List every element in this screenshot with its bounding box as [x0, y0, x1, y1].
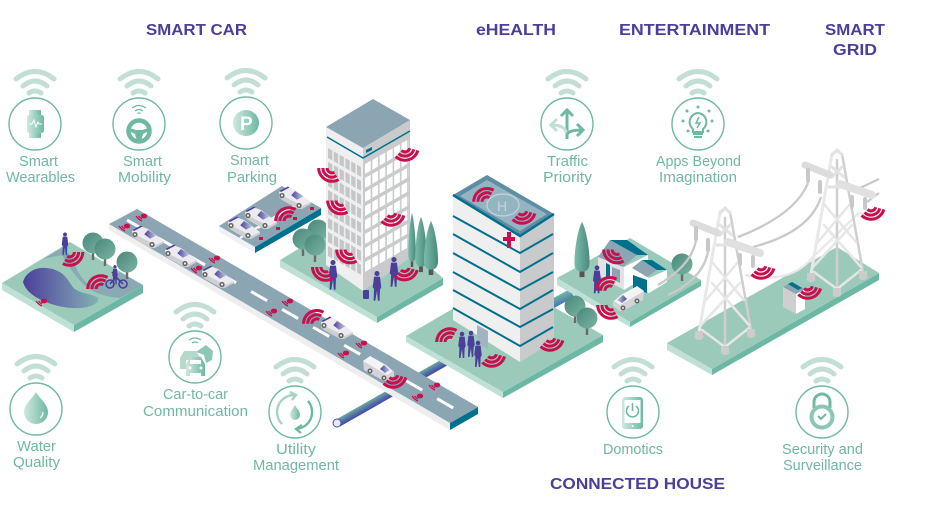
label: Smart Mobility [118, 154, 172, 186]
label: Water Quality: Quality [13, 455, 61, 471]
label: Utility Management [253, 442, 339, 474]
path [43, 248, 143, 298]
road cars [132, 226, 394, 381]
road [109, 209, 478, 430]
helipad roof [453, 175, 554, 236]
icon: Car-to-car Communication [169, 304, 221, 383]
title: CONNECTED HOUSE: CONNECTED HOUSE [550, 476, 725, 493]
label: Apps Beyond Imagination: Imagination [659, 170, 737, 186]
power lines [658, 179, 880, 295]
house tree [574, 222, 590, 277]
icon: Apps Beyond Imagination [672, 72, 724, 150]
trees [82, 232, 138, 279]
cyclist [106, 265, 127, 288]
pylon far [805, 150, 872, 297]
label: Utility Management: Utility [276, 442, 317, 458]
label: Water Quality: Water [17, 439, 56, 455]
label: Smart Wearables [6, 154, 75, 186]
icon: Domotics [607, 360, 659, 438]
label: Car-to-car Communication [143, 387, 248, 420]
pipe [333, 293, 572, 427]
hospital [453, 175, 554, 362]
label: Smart Mobility: Smart [123, 154, 162, 170]
label: Domotics: Domotics [603, 442, 663, 458]
icon: Smart Parking: P [240, 114, 253, 135]
title: SMART GRID: SMART [825, 22, 885, 39]
label: Smart Mobility: Mobility [118, 170, 172, 186]
house van [613, 286, 644, 311]
label: Smart Wearables: Smart [19, 154, 58, 170]
label: Apps Beyond Imagination: Apps Beyond [656, 154, 741, 170]
road sensors [119, 214, 440, 401]
icon: Traffic Priority [541, 72, 593, 150]
label: Traffic Priority [543, 154, 593, 186]
label: Smart Parking: Smart [230, 153, 269, 169]
label: Security and Surveillance: Security and [782, 442, 863, 458]
house person [593, 265, 601, 293]
label: Car-to-car Communication: Communication [143, 404, 248, 420]
label: Water Quality [13, 439, 61, 471]
tree near house [672, 254, 692, 281]
label: Security and Surveillance: Surveillance [783, 458, 862, 474]
icon: Smart Wearables [9, 72, 61, 150]
icon: Utility Management [269, 360, 321, 438]
park platform [2, 232, 143, 332]
grid platform [667, 247, 879, 375]
icon: Security and Surveillance [796, 360, 848, 438]
office platform [280, 210, 443, 323]
tall trees [408, 213, 438, 275]
utility box [783, 282, 805, 314]
title: SMART CAR: SMART CAR [146, 22, 247, 39]
label: Traffic Priority: Traffic [547, 154, 588, 170]
parking lot [219, 186, 321, 253]
label: Car-to-car Communication: Car-to-car [163, 387, 228, 403]
house platform [557, 238, 701, 327]
hospital platform [406, 279, 603, 398]
office tower [326, 99, 410, 291]
parked cars [228, 186, 311, 239]
title: SMART GRID [825, 22, 885, 59]
icon: Smart Mobility [113, 72, 165, 150]
signal waves [36, 146, 886, 390]
runner [62, 232, 68, 255]
label: Smart Wearables: Wearables [6, 170, 75, 186]
title: ENTERTAINMENT: ENTERTAINMENT [619, 22, 770, 39]
title: eHEALTH: eHEALTH [476, 22, 556, 39]
title: SMART GRID: GRID [833, 42, 877, 59]
label: Utility Management: Management [253, 458, 339, 474]
pond [23, 268, 98, 308]
office people [329, 257, 398, 301]
label: Security and Surveillance [782, 442, 863, 474]
label: Traffic Priority: Priority [543, 170, 593, 186]
label: Smart Parking [227, 153, 277, 186]
pylon near [693, 208, 760, 355]
label: Smart Parking: Parking [227, 170, 277, 186]
icon: Smart Parking [220, 70, 272, 149]
hospital: H [497, 198, 507, 214]
icon: Water Quality [10, 356, 62, 435]
hospital trees [564, 296, 598, 335]
hospital people [458, 331, 482, 367]
trees by office [292, 220, 328, 262]
parking sensors [259, 207, 314, 240]
house [598, 240, 667, 293]
red cross [503, 232, 515, 248]
label: Apps Beyond Imagination [656, 154, 741, 186]
